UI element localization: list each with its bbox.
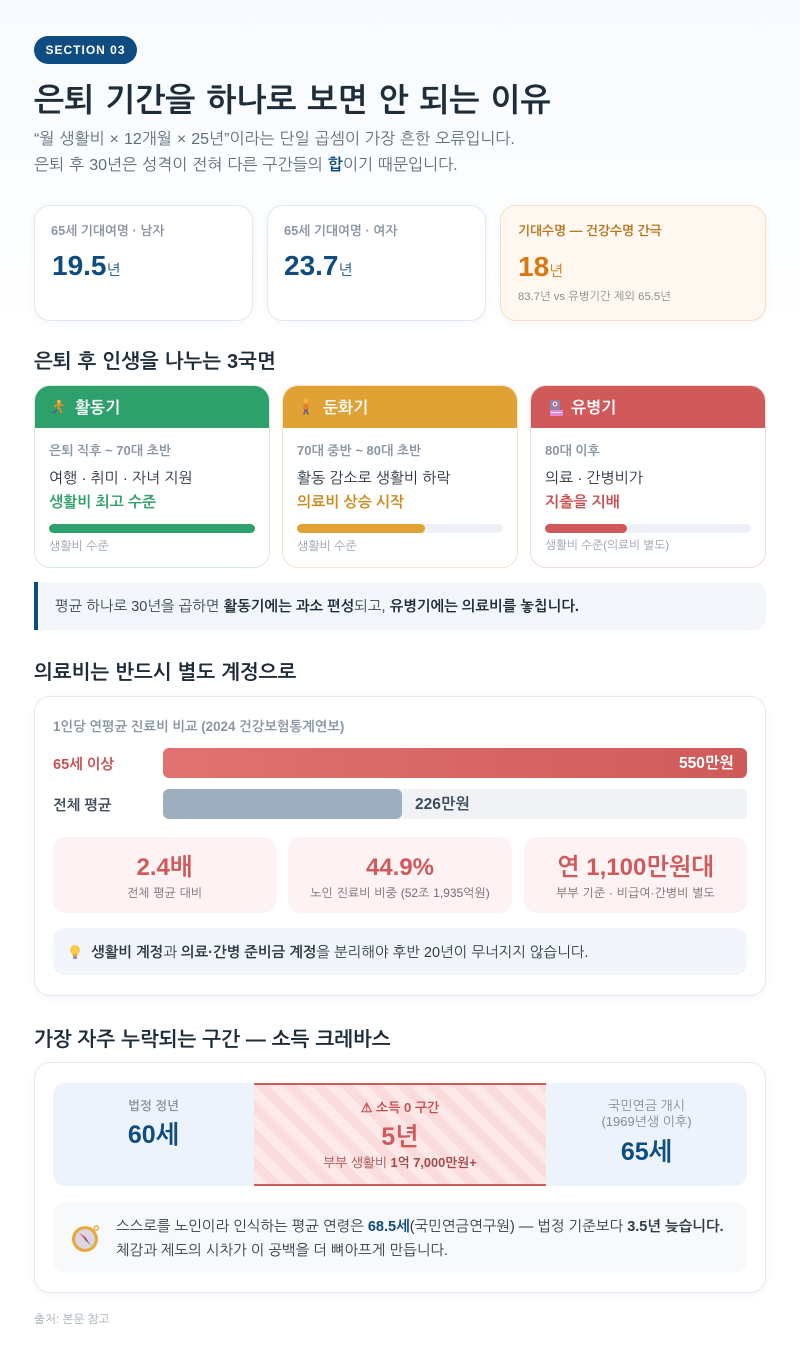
chart caption: 1인당 연평균 진료비 비교 (2024 건강보험통계연보)	[53, 719, 344, 734]
note text: 체감과 제도의 시차가 이 공백을 더 뼈아프게 만듭니다.	[116, 1243, 448, 1259]
bar label: 생활비 수준(의료비 별도)	[545, 539, 669, 552]
phase name: 활동기	[75, 400, 120, 417]
heading: medical costs: 의료비는 반드시 별도 계정으로	[34, 662, 296, 684]
label: 기대수명 — 건강수명 간극	[518, 223, 662, 238]
heading: three phases: 은퇴 후 인생을 나누는 3국면	[34, 351, 276, 373]
icon: runner	[52, 400, 64, 414]
tip box	[53, 928, 747, 975]
age: 60세	[128, 1121, 179, 1149]
period: 70대 중반 ~ 80대 초반	[297, 443, 421, 458]
note box	[53, 1202, 747, 1272]
subtitle: “월 생활비 × 12개월 × 25년”이라는 단일 곱셈이 가장 흔한 오류입니다.	[34, 131, 515, 148]
section badge	[34, 36, 137, 64]
bar label: 생활비 수준	[297, 539, 357, 553]
panel: income cliff	[34, 1062, 766, 1293]
period: 은퇴 직후 ~ 70대 초반	[49, 443, 171, 458]
stat card: male life expectancy	[34, 205, 253, 321]
note: 83.7년 vs 유병기간 제외 65.5년	[518, 291, 671, 303]
subtitle: 은퇴 후 30년은 성격이 전혀 다른 구간들의 합이기 때문입니다.	[34, 156, 458, 174]
title: 은퇴 기간을 하나로 보면 안 되는 이유	[34, 82, 551, 118]
number: 연 1,100만원대	[557, 854, 714, 881]
highlight: 지출을 지배	[545, 494, 620, 511]
value: 23.7년	[284, 250, 353, 281]
segment: income gap	[254, 1083, 546, 1186]
label	[601, 1098, 692, 1129]
value: 19.5년	[52, 250, 121, 281]
note text: 스스로를 노인이라 인식하는 평균 연령은 68.5세(국민연금연구원) — 법정 기준보다 3.5년 늦습니다.	[116, 1219, 724, 1235]
bar chart: overall average	[53, 789, 747, 819]
subtitle	[34, 130, 515, 174]
stat card: female life expectancy	[267, 205, 486, 321]
segment: retirement age	[128, 1099, 179, 1149]
bar fill	[163, 789, 402, 819]
description: 전체 평균 대비	[127, 886, 202, 900]
stat: multiple	[53, 837, 276, 913]
icon: light bulb	[70, 945, 80, 959]
panel: illness phase	[530, 385, 766, 568]
heading: income cliff: 가장 자주 누락되는 구간 — 소득 크레바스	[34, 1029, 391, 1051]
value: 18년	[518, 251, 563, 282]
bar track	[163, 789, 747, 819]
bar	[163, 748, 747, 778]
level bar	[297, 524, 503, 533]
icon: walker	[303, 398, 309, 415]
label: ⚠ 소득 0 구간	[361, 1100, 439, 1115]
section badge: SECTION 03	[45, 43, 126, 57]
phase header	[34, 385, 270, 428]
level bar	[49, 524, 255, 533]
highlight: 의료비 상승 시작	[297, 494, 404, 511]
note text	[116, 1218, 724, 1259]
phase header	[282, 385, 518, 428]
callout: averaging warning	[34, 582, 766, 630]
stat: share	[288, 837, 512, 913]
description: 의료 · 간병비가	[545, 470, 643, 487]
label: (1969년생 이후)	[601, 1114, 692, 1129]
period: 80대 이후	[545, 443, 600, 458]
panel: slowing phase	[282, 385, 518, 568]
label: 법정 정년	[128, 1099, 179, 1113]
segment: pension start	[601, 1098, 692, 1166]
label: 65세 기대여명 · 남자	[51, 223, 164, 238]
stat card: life expectancy gap	[500, 205, 766, 321]
highlight: 생활비 최고 수준	[49, 494, 156, 511]
level bar	[545, 524, 751, 533]
description: 여행 · 취미 · 자녀 지원	[49, 470, 193, 487]
row label: 65세 이상	[53, 757, 114, 773]
row label: 전체 평균	[53, 798, 112, 814]
bar label: 생활비 수준	[49, 539, 109, 553]
phase header	[530, 385, 766, 428]
description: 부부 기준 · 비급여·간병비 별도	[556, 886, 715, 900]
timeline	[53, 1083, 747, 1186]
source note: 출처: 본문 참고	[34, 1313, 110, 1326]
icon: compass	[72, 1225, 100, 1252]
bar chart: 65+	[53, 748, 747, 778]
description: 노인 진료비 비중 (52조 1,935억원)	[310, 886, 490, 900]
phase name: 유병기	[571, 400, 616, 417]
cost: 부부 생활비 1억 7,000만원+	[323, 1155, 477, 1170]
callout: averaging warning: 평균 하나로 30년을 곱하면 활동기에는 과소 편성되고, 유병기에는 의료비를 놓칩니다.	[55, 599, 579, 615]
age: 65세	[621, 1138, 672, 1166]
duration: 5년	[381, 1123, 419, 1151]
value: 550만원	[679, 755, 734, 772]
stat: annual cost	[524, 837, 747, 913]
number: 44.9%	[366, 854, 434, 881]
description: 활동 감소로 생활비 하락	[297, 470, 451, 487]
value: 226만원	[415, 796, 470, 813]
label: 65세 기대여명 · 여자	[284, 223, 397, 238]
icon: hospital	[550, 400, 563, 416]
tip text: 생활비 계정과 의료·간병 준비금 계정을 분리해야 후반 20년이 무너지지 않습니다.	[91, 945, 588, 961]
panel: active phase	[34, 385, 270, 568]
panel: medical costs	[34, 696, 766, 996]
label: 국민연금 개시	[608, 1098, 685, 1113]
number: 2.4배	[137, 854, 192, 881]
phase name: 둔화기	[323, 400, 368, 417]
